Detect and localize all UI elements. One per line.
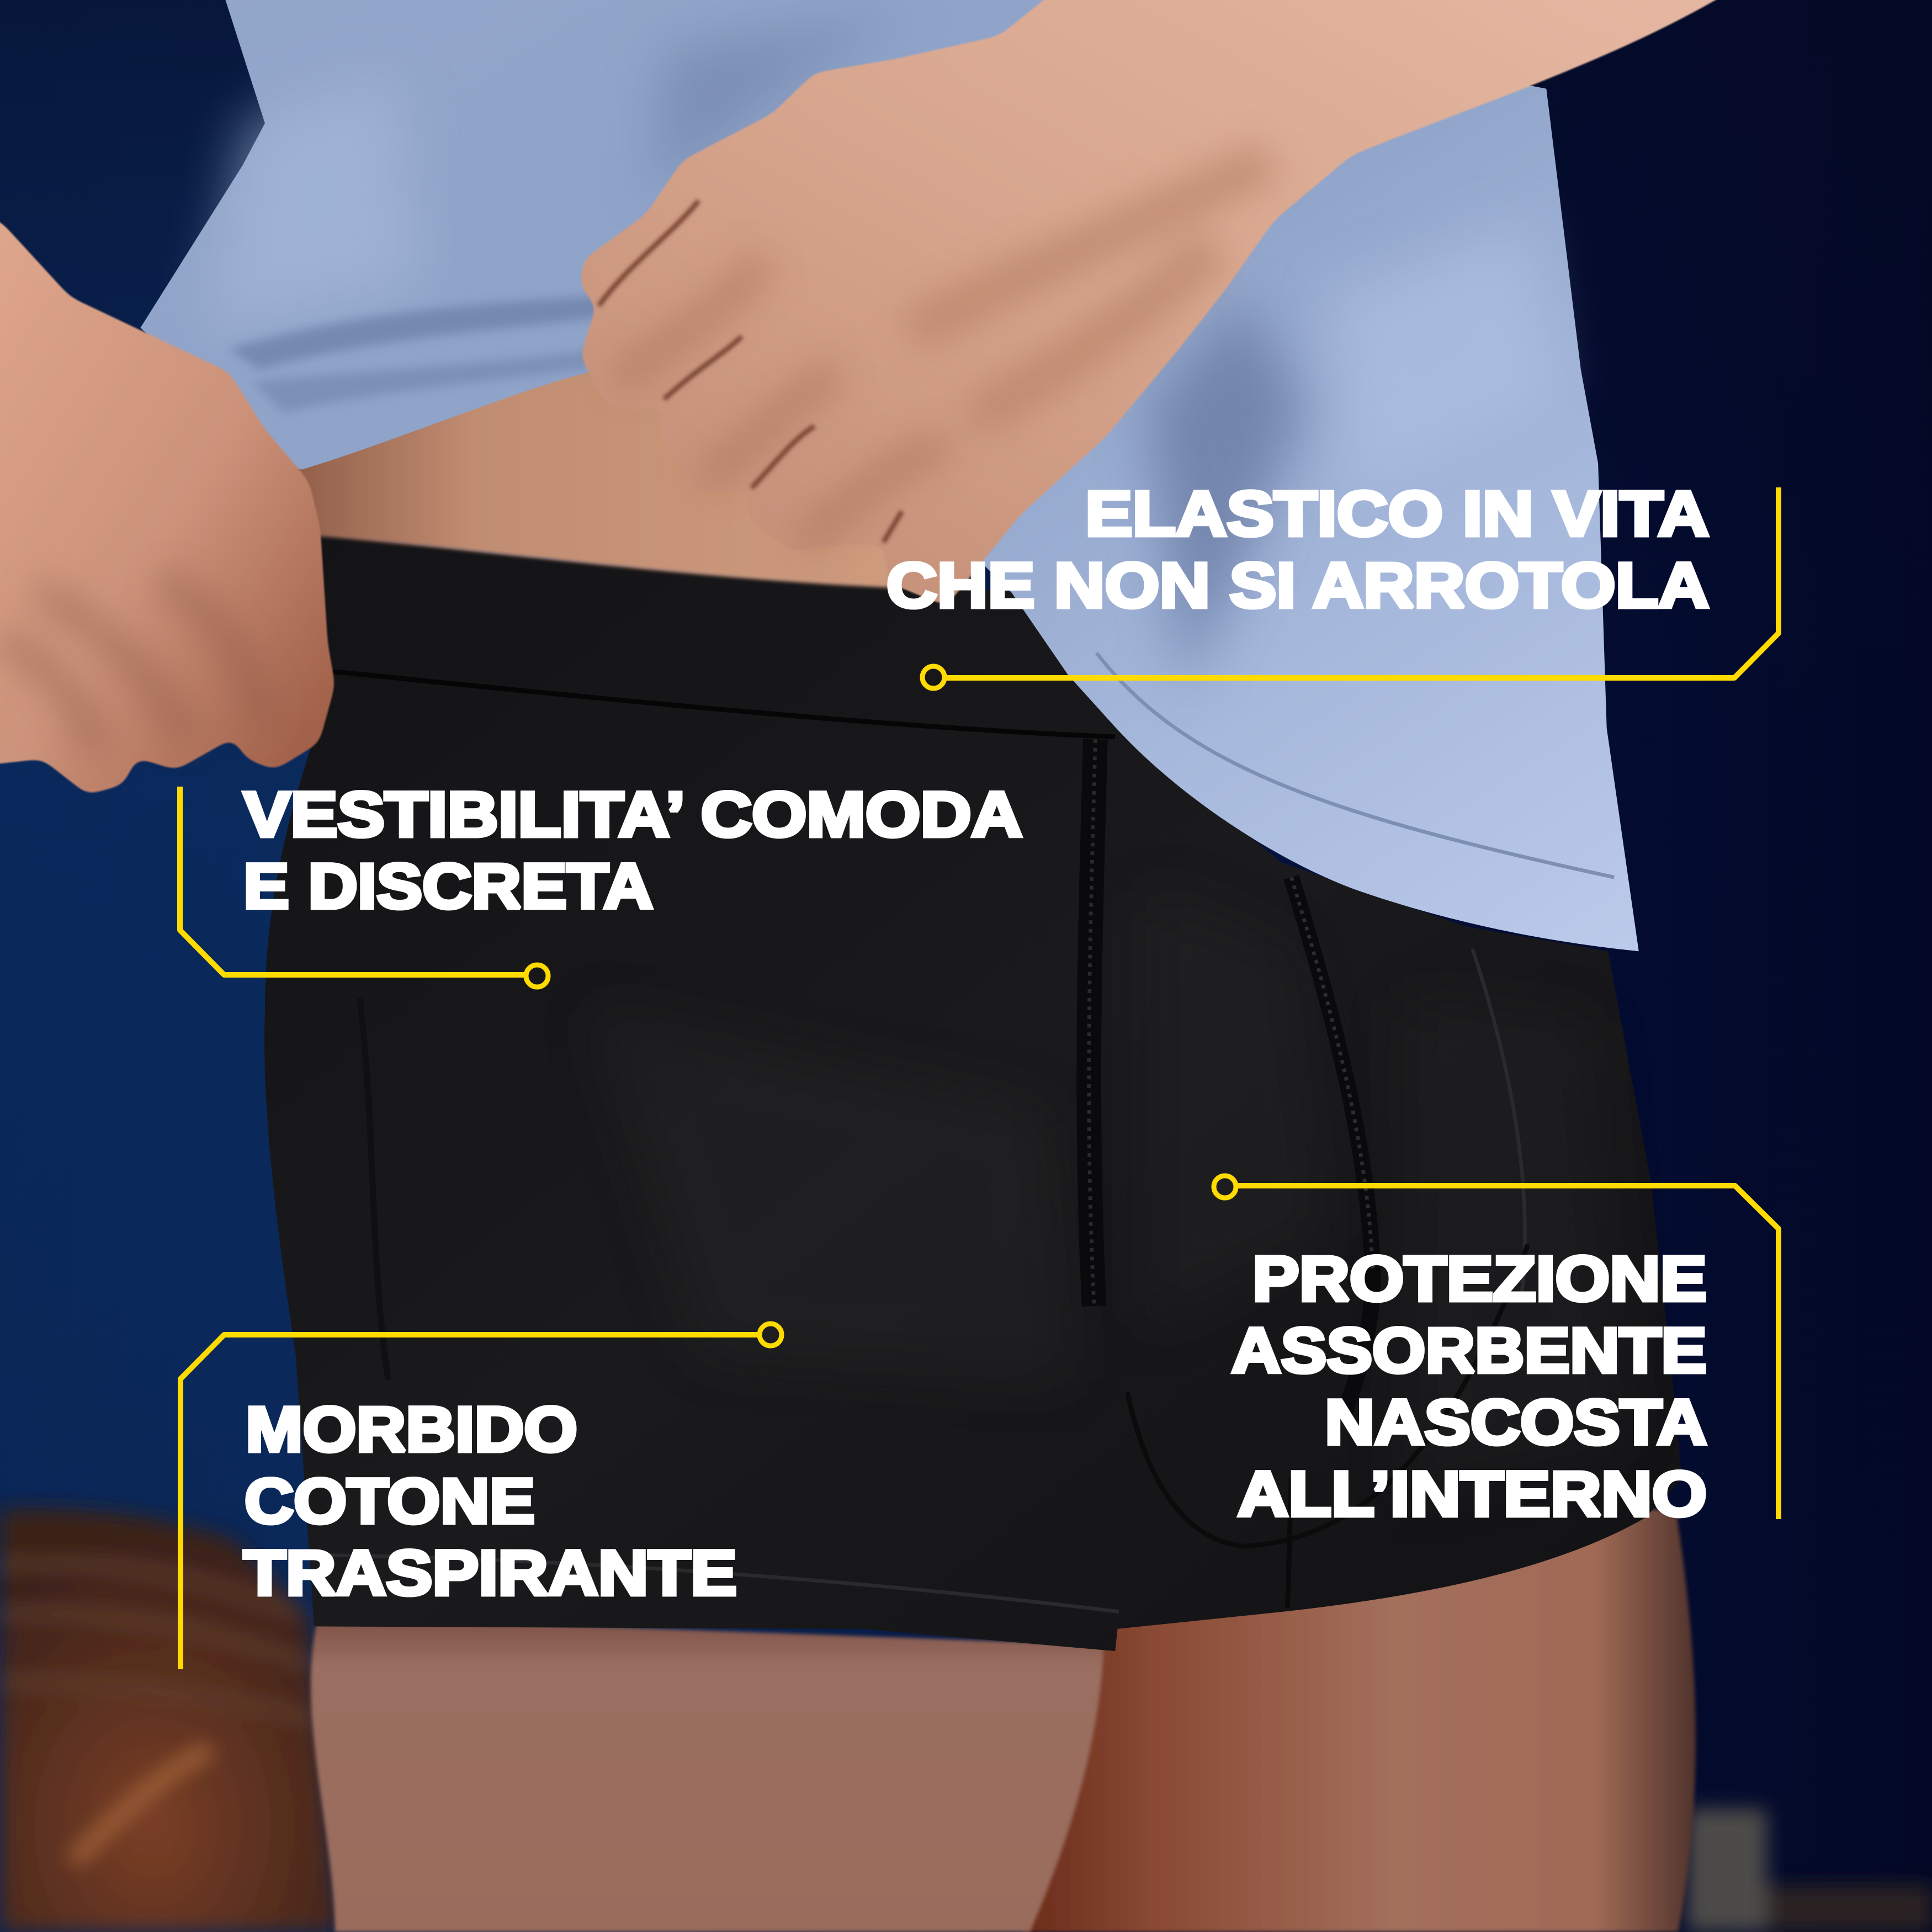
callout: protezione assorbente (1214, 1176, 1779, 1530)
leather chair (0, 1509, 339, 1932)
boxers (264, 532, 1682, 1651)
left fist (0, 209, 335, 795)
callout: morbido cotone (181, 1324, 782, 1669)
connector dot: vestibilita (526, 965, 548, 987)
text: protezione assorbente: ALL’INTERNO (1238, 1459, 1707, 1530)
connector line: protezione (1236, 1186, 1779, 1519)
left thigh (311, 1617, 1104, 1932)
text: morbido cotone traspirante: MORBIDO (246, 1394, 577, 1465)
connector dot: protezione (1214, 1176, 1236, 1198)
text: morbido cotone traspirante: TRASPIRANTE (243, 1538, 737, 1609)
text: vestibilita comoda: VESTIBILITA’ COMODA (243, 779, 1022, 850)
connector line: elastico (945, 487, 1779, 678)
hem stitching (314, 1555, 1119, 1612)
callout: vestibilita comoda (180, 779, 1022, 987)
connector dot: morbido (760, 1324, 782, 1346)
left side seam (360, 998, 388, 1380)
text: protezione assorbente: NASCOSTA (1325, 1387, 1707, 1458)
right thigh (1023, 1509, 1696, 1932)
connector line: vestibilita (180, 787, 526, 975)
shirt folds (229, 296, 604, 370)
text: elastico in vita: ELASTICO IN VITA (1085, 479, 1709, 549)
text: protezione assorbente: ASSORBENTE (1232, 1315, 1707, 1386)
hand tan band (912, 160, 1269, 419)
text: protezione assorbente: PROTEZIONE (1252, 1244, 1707, 1314)
fly seam (1291, 877, 1373, 1417)
shirt (140, 0, 1639, 951)
finger gaps (599, 201, 902, 542)
pouch seam (1472, 949, 1525, 1294)
centre seam (1089, 739, 1095, 1306)
text: morbido cotone traspirante (243, 1394, 737, 1609)
text: protezione assorbente (1232, 1244, 1707, 1530)
connector line: morbido (181, 1335, 759, 1669)
right hand and forearm (580, 0, 1774, 606)
finger shading (616, 259, 949, 542)
floor object bottom right (1687, 1809, 1932, 1932)
text: morbido cotone traspirante: COTONE (245, 1466, 535, 1537)
text: vestibilita comoda (243, 779, 1022, 922)
connector dot: elastico (922, 666, 944, 688)
exposed belly (277, 333, 936, 588)
callout: elastico in vita (887, 479, 1779, 688)
waistband seam (333, 672, 1115, 737)
text: elastico in vita: CHE NON SI ARROTOLA (887, 550, 1709, 621)
text: elastico in vita (887, 479, 1709, 621)
text: vestibilita comoda: E DISCRETA (243, 851, 653, 922)
